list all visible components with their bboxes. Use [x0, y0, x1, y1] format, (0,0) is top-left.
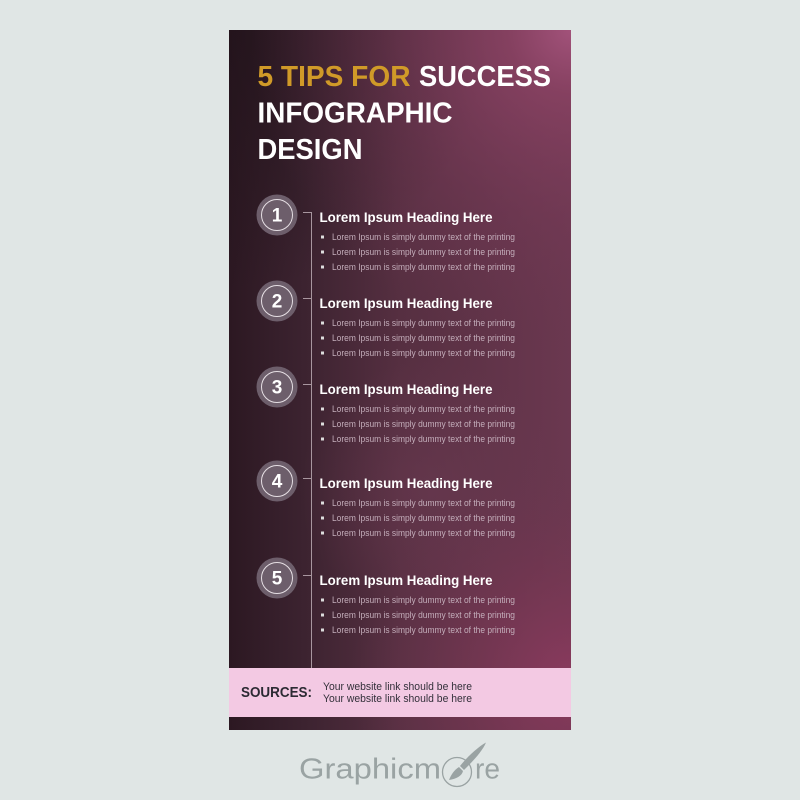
tip 3 bullets [321, 404, 515, 444]
icon: number 4 badge: 4 [272, 472, 283, 492]
logo: Graphicmore [299, 742, 500, 786]
tip 1 heading: Lorem Ipsum Heading Here [320, 210, 493, 225]
icon: number 4 badge [256, 460, 298, 502]
tip 2 bullets [321, 318, 515, 358]
title [258, 61, 551, 166]
tip 2 heading: Lorem Ipsum Heading Here [320, 296, 493, 311]
panel: infographic background [229, 30, 571, 730]
tip 5 bullets [321, 595, 515, 635]
sources band [229, 668, 571, 717]
icon: number 2 badge [256, 280, 298, 322]
icon: number 5 badge [256, 558, 298, 598]
tip 3 heading: Lorem Ipsum Heading Here [320, 382, 493, 397]
icon: number 5 badge: 5 [272, 568, 283, 590]
logo: Graphicmore: re [475, 754, 500, 786]
tip 2 [256, 280, 515, 358]
icon: number 1 badge [256, 194, 298, 236]
tip 3 [256, 366, 515, 444]
title: SUCCESS [419, 61, 551, 93]
title: DESIGN [258, 134, 362, 166]
tip 3 bullets: Lorem Ipsum is simply dummy text of the printing [332, 419, 515, 429]
title: INFOGRAPHIC [258, 98, 453, 130]
tip 4 heading: Lorem Ipsum Heading Here [320, 476, 493, 491]
tip 5 bullets: Lorem Ipsum is simply dummy text of the printing [332, 595, 515, 605]
sources label: SOURCES: [241, 685, 312, 701]
source links [323, 681, 472, 705]
tip 1 bullets: Lorem Ipsum is simply dummy text of the printing [332, 232, 515, 242]
tip 4 bullets: Lorem Ipsum is simply dummy text of the printing [332, 528, 515, 538]
icon: brush in circle [442, 742, 486, 786]
tip 4 bullets: Lorem Ipsum is simply dummy text of the printing [332, 513, 515, 523]
tip 5 heading: Lorem Ipsum Heading Here [320, 573, 493, 588]
tip 2 bullets: Lorem Ipsum is simply dummy text of the printing [332, 348, 515, 358]
tip 5 bullets: Lorem Ipsum is simply dummy text of the printing [332, 625, 515, 635]
tip 1 [256, 194, 515, 272]
tip 2 bullets: Lorem Ipsum is simply dummy text of the printing [332, 333, 515, 343]
tip 4 [256, 460, 515, 538]
tip 4 bullets: Lorem Ipsum is simply dummy text of the printing [332, 498, 515, 508]
icon: number 2 badge: 2 [272, 292, 282, 312]
tip 5 bullets: Lorem Ipsum is simply dummy text of the printing [332, 610, 515, 620]
source links: Your website link should be here [323, 693, 472, 705]
icon: number 1 badge: 1 [272, 206, 283, 226]
tip 1 bullets [321, 232, 515, 272]
tip 3 bullets: Lorem Ipsum is simply dummy text of the printing [332, 404, 515, 414]
tip 4 bullets [321, 498, 515, 538]
tip 3 bullets: Lorem Ipsum is simply dummy text of the printing [332, 434, 515, 444]
tip 1 bullets: Lorem Ipsum is simply dummy text of the printing [332, 262, 515, 272]
logo: Graphicmore: Graphicm [299, 754, 441, 786]
icon: number 3 badge [256, 366, 298, 408]
timeline connector [303, 212, 312, 668]
title: 5 TIPS FOR [258, 61, 411, 93]
tip 1 bullets: Lorem Ipsum is simply dummy text of the printing [332, 247, 515, 257]
tip 5 [256, 558, 515, 635]
tip 2 bullets: Lorem Ipsum is simply dummy text of the printing [332, 318, 515, 328]
icon: number 3 badge: 3 [272, 378, 282, 398]
source links: Your website link should be here [323, 681, 472, 693]
